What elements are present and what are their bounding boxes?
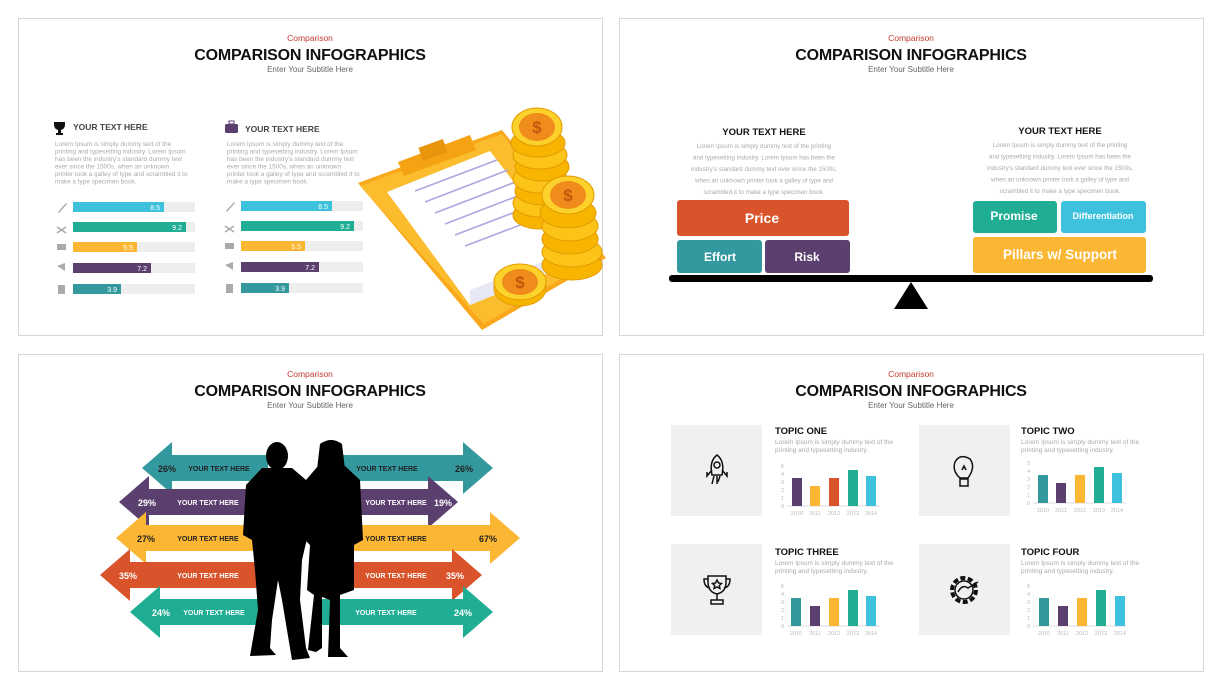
topic three: 2012 [828, 631, 840, 637]
topic two: 2 [1027, 485, 1030, 491]
left text block: Lorem Ipsum is simply dummy text of the printing [697, 143, 832, 150]
topic three: Lorem Ipsum is simply dummy text of the [775, 560, 894, 567]
left text block: scrambled it to make a type specimen book. [704, 189, 825, 196]
topic two: 1 [1027, 493, 1030, 499]
topic three: printing and typesetting industry. [775, 568, 868, 575]
slide 1 header: Comparison [287, 33, 333, 43]
column 1 bar chart: 9.2 [172, 225, 182, 232]
arrow labels: YOUR TEXT HERE [365, 536, 427, 543]
left text block: and typesetting industry. Lorem Ipsum has been the [693, 154, 836, 162]
silhouette: woman [305, 440, 363, 657]
icon: rocket [707, 455, 727, 484]
column 2 text block: make a type specimen book. [227, 178, 309, 186]
illustration: clipboard with coins: $ [515, 273, 525, 292]
icon: trophy star [704, 576, 730, 604]
topic three: 1 [781, 616, 784, 622]
column 2 text block: YOUR TEXT HERE [245, 124, 320, 134]
column 2 bar chart: 5.5 [291, 244, 301, 251]
right blocks: Promise Differentiation Pillars: Promise [990, 209, 1038, 223]
left text block: industry's standard dummy text ever since the 1500s, [691, 166, 837, 173]
slide 3 header: COMPARISON INFOGRAPHICS [194, 383, 426, 400]
column 1 text block: printing and typesetting industry. Lorem Ipsum [55, 148, 186, 156]
topic two [919, 425, 1140, 516]
right text block [987, 126, 1133, 195]
chart: 0 [781, 504, 784, 510]
left text block [691, 127, 837, 196]
arrow labels: YOUR TEXT HERE [177, 500, 239, 507]
arrow labels: YOUR TEXT HERE [356, 466, 418, 473]
topic three: 2014 [865, 631, 877, 637]
column 2 text block [225, 121, 360, 186]
topic two: 2011 [1055, 508, 1067, 514]
topic four: 2014 [1114, 631, 1126, 637]
panel: slide 1 bar comparison [18, 18, 606, 336]
topic one: TOPIC ONE [775, 426, 827, 437]
slide 4 header [795, 369, 1027, 410]
arrow labels: YOUR TEXT HERE [177, 573, 239, 580]
topic three: 3 [781, 600, 784, 606]
right text block: Lorem Ipsum is simply dummy text of the printing [993, 142, 1128, 149]
column 1 text block: YOUR TEXT HERE [73, 122, 148, 132]
arrow labels: 19% [434, 498, 452, 508]
topic four: 2010 [1038, 631, 1050, 637]
column 2 text block: has been the industry's standard dummy text [227, 156, 354, 163]
topic two: 2010 [1037, 508, 1049, 514]
topic four: 1 [1027, 616, 1030, 622]
illustration: clipboard with coins [358, 108, 606, 330]
icon: lightbulb [954, 457, 973, 486]
column 1 bar chart: 7.2 [137, 266, 147, 273]
slide 2 header: Comparison [888, 33, 934, 43]
silhouette: man [243, 442, 310, 660]
topic four: 2011 [1057, 631, 1069, 637]
column 1 bar chart [57, 202, 195, 294]
slide 4 header: Comparison [888, 369, 934, 379]
column 1 bar chart: 3.9 [107, 287, 117, 294]
slide 1 header: Enter Your Subtitle Here [267, 65, 353, 74]
topic two: 5 [1027, 461, 1030, 467]
topic two: 2012 [1074, 508, 1086, 514]
icon: gear with hand [952, 578, 978, 602]
arrow labels: YOUR TEXT HERE [177, 536, 239, 543]
topic four: 3 [1027, 600, 1030, 606]
right blocks: Promise Differentiation Pillars [973, 201, 1146, 273]
chart: 2 [781, 488, 784, 494]
column 1 text block: printer took a galley of type and scrambled it to [55, 171, 188, 178]
slide 1 header [194, 33, 426, 74]
left text block: YOUR TEXT HERE [722, 127, 806, 138]
column 2 text block: printer took a galley of type and scrambled it to [227, 171, 360, 178]
chart: 2013 [847, 511, 859, 517]
right blocks: Promise Differentiation Pillars: Differentiation [1072, 211, 1134, 221]
column 1 bar chart: 8.5 [150, 205, 160, 212]
topic four: 2012 [1076, 631, 1088, 637]
chart: 5 [781, 464, 784, 470]
topic one: Lorem Ipsum is simply dummy text of the [775, 439, 894, 446]
right text block: when an unknown printer took a galley of type and [990, 176, 1130, 184]
chart: 2011 [809, 511, 821, 517]
right blocks: Promise Differentiation Pillars: Pillars w/ Support [1003, 247, 1118, 262]
arrow labels: YOUR TEXT HERE [365, 500, 427, 507]
arrow labels: YOUR TEXT HERE [188, 466, 250, 473]
chart: 2012 [828, 511, 840, 517]
topic three: 0 [781, 624, 784, 630]
topic four: printing and typesetting industry. [1021, 568, 1114, 575]
left blocks: Price Effort Risk [677, 200, 850, 273]
topic three: 2010 [790, 631, 802, 637]
topic three: 5 [781, 584, 784, 590]
topic four: 0 [1027, 624, 1030, 630]
column 2 text block: printing and typesetting industry. Lorem Ipsum [227, 148, 358, 156]
column 1 text block: make a type specimen book. [55, 178, 137, 186]
topic four: 4 [1027, 592, 1030, 598]
slide 1 header: COMPARISON INFOGRAPHICS [194, 47, 426, 64]
topic three: 2013 [847, 631, 859, 637]
chart: 1 [781, 496, 784, 502]
slide 3 header [194, 369, 426, 410]
left blocks: Price Effort Risk: Risk [794, 250, 820, 264]
column 1 bar chart: 5.5 [123, 245, 133, 252]
chart: 2014 [865, 511, 877, 517]
panel: slide 4 topic charts [620, 354, 1204, 672]
panel: slide 3 arrows with silhouettes [18, 354, 602, 672]
arrow labels: 29% [138, 498, 156, 508]
illustration: clipboard with coins: $ [563, 186, 573, 205]
topic three: 2 [781, 608, 784, 614]
topic two: 4 [1027, 469, 1030, 475]
arrow labels: 26% [158, 464, 176, 474]
chart [781, 464, 880, 517]
chart: 3 [781, 480, 784, 486]
arrow labels: 24% [152, 608, 170, 618]
arrow labels: 35% [446, 571, 464, 581]
topic one: printing and typesetting industry. [775, 447, 868, 454]
topic four: TOPIC FOUR [1021, 547, 1080, 558]
arrow labels: 35% [119, 571, 137, 581]
topic two: printing and typesetting industry. [1021, 447, 1114, 454]
panel: slide 2 balance scale [620, 18, 1204, 336]
column 2 text block: Lorem Ipsum is simply dummy text of the [227, 141, 344, 148]
right text block: YOUR TEXT HERE [1018, 126, 1102, 137]
slide 4 header: COMPARISON INFOGRAPHICS [795, 383, 1027, 400]
topic four: 2 [1027, 608, 1030, 614]
topic one [671, 425, 894, 517]
topic two: TOPIC TWO [1021, 426, 1075, 437]
arrow labels [119, 464, 497, 618]
topic four: 5 [1027, 584, 1030, 590]
left blocks: Price Effort Risk: Effort [704, 250, 736, 264]
topic two: 0 [1027, 501, 1030, 507]
right text block: industry's standard dummy text ever since the 1500s, [987, 165, 1133, 172]
topic two: Lorem Ipsum is simply dummy text of the [1021, 439, 1140, 446]
right text block: and typesetting industry. Lorem Ipsum has been the [989, 154, 1132, 160]
column 1 text block: Lorem Ipsum is simply dummy text of the [55, 141, 172, 148]
topic four: 2013 [1095, 631, 1107, 637]
slide 4 header: Enter Your Subtitle Here [868, 401, 954, 410]
arrow labels: YOUR TEXT HERE [183, 610, 245, 617]
topic three [671, 544, 894, 637]
slide 3 header: Comparison [287, 369, 333, 379]
left text block: when an unknown printer took a galley of type and [694, 178, 834, 184]
arrow labels: YOUR TEXT HERE [355, 610, 417, 617]
topic four [919, 544, 1140, 637]
illustration: clipboard with coins: $ [532, 118, 542, 137]
column 2 bar chart: 8.5 [318, 204, 328, 211]
column 2 bar chart [225, 201, 363, 293]
topic four: Lorem Ipsum is simply dummy text of the [1021, 560, 1140, 567]
column 1 text block [54, 122, 188, 186]
topic three: 2011 [809, 631, 821, 637]
arrow labels: 27% [137, 534, 155, 544]
column 1 text block: has been the industry's standard dummy text [55, 156, 182, 163]
column 2 bar chart: 3.9 [275, 286, 285, 293]
slide 2 header: Enter Your Subtitle Here [868, 65, 954, 74]
slide 2 header [795, 33, 1027, 74]
column 2 bar chart: 7.2 [305, 265, 315, 272]
arrow labels: 26% [455, 464, 473, 474]
chart: 4 [781, 472, 784, 478]
column 2 text block: ever since the 1500s, when an unknown [227, 164, 341, 170]
topic two: 3 [1027, 477, 1030, 483]
arrow labels: 24% [454, 608, 472, 618]
slide 3 header: Enter Your Subtitle Here [267, 401, 353, 410]
topic two: 2013 [1093, 508, 1105, 514]
scale beam and fulcrum [669, 275, 1153, 309]
arrow labels: YOUR TEXT HERE [365, 573, 427, 580]
column 1 text block: ever since the 1500s, when an unknown [55, 164, 169, 170]
column 2 bar chart: 9.2 [340, 224, 350, 231]
right text block: scrambled it to make a type specimen book. [1000, 188, 1121, 195]
slide 2 header: COMPARISON INFOGRAPHICS [795, 47, 1027, 64]
chart: 2010 [791, 511, 803, 517]
topic three: TOPIC THREE [775, 547, 839, 558]
topic three: 4 [781, 592, 784, 598]
topic two: 2014 [1111, 508, 1123, 514]
arrow labels: 67% [479, 534, 497, 544]
left blocks: Price Effort Risk: Price [745, 210, 779, 226]
arrows [100, 442, 520, 638]
